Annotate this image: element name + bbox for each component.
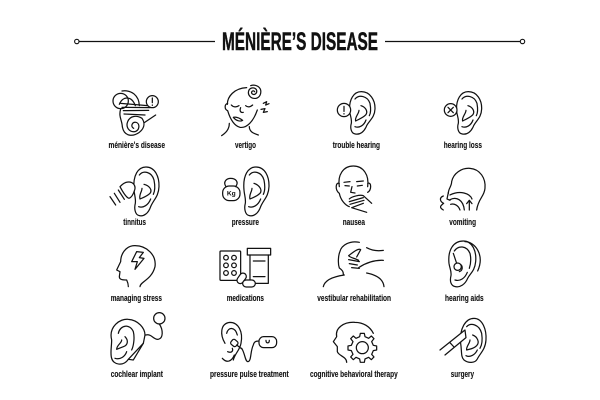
panel: surgery: [440, 318, 486, 380]
panel: vestibular rehabilitation: [317, 242, 391, 304]
label: ménière's disease: [108, 140, 165, 151]
label: vestibular rehabilitation: [317, 293, 391, 304]
icon: ear with pulse device: [222, 322, 277, 362]
panel: pressure pulse treatment: [210, 322, 289, 380]
icon: face with hand over mouth: [336, 166, 372, 212]
icon: inner ear with alert: [113, 91, 158, 135]
panel: vertigo: [222, 85, 269, 151]
icon: ear with cross: [444, 92, 482, 134]
icon: ear with surgical tool: [440, 318, 486, 362]
label: hearing aids: [445, 293, 484, 304]
icon: ear with sound: [110, 167, 159, 216]
panel: vomiting: [440, 168, 485, 228]
label: surgery: [451, 369, 474, 380]
panel: pressure: [223, 167, 269, 228]
icon: head with bolt: [117, 246, 155, 287]
panel: cochlear implant: [111, 313, 165, 380]
icon: head with gear: [333, 322, 377, 362]
icon: ear with alert: [337, 92, 375, 134]
panel: hearing loss: [444, 92, 482, 151]
label: trouble hearing: [333, 140, 380, 151]
label: pressure pulse treatment: [210, 369, 289, 380]
icon: head profile with throat arrow: [440, 168, 485, 210]
panel: ménière's disease: [108, 91, 165, 151]
icon: face with spiral: [222, 85, 269, 136]
panel: nausea: [336, 166, 372, 228]
panel: trouble hearing: [333, 92, 380, 151]
panel: cognitive behavioral therapy: [310, 322, 398, 380]
panel: tinnitus: [110, 167, 159, 228]
title: MÉNIÈRE’S DISEASE: [222, 27, 378, 56]
label: managing stress: [111, 293, 162, 304]
icon: ear with hearing aid: [449, 241, 480, 287]
label: cognitive behavioral therapy: [310, 369, 398, 380]
label: pressure: [232, 217, 259, 228]
icon: ear with cochlear implant: [111, 313, 165, 364]
panel: hearing aids: [445, 241, 484, 304]
label: nausea: [343, 217, 365, 228]
icon: ear with weight: Kg: [227, 191, 236, 198]
label: vomiting: [449, 217, 476, 228]
label: medications: [227, 293, 264, 304]
label: tinnitus: [123, 217, 146, 228]
label: hearing loss: [444, 140, 482, 151]
panel: managing stress: [111, 246, 162, 304]
icon: hand on patient head: [323, 242, 384, 287]
icon: blister pack, bottle, pills: [220, 248, 271, 287]
panel: medications: [220, 248, 271, 304]
label: vertigo: [235, 140, 256, 151]
label: cochlear implant: [111, 369, 164, 380]
title: [75, 27, 525, 56]
